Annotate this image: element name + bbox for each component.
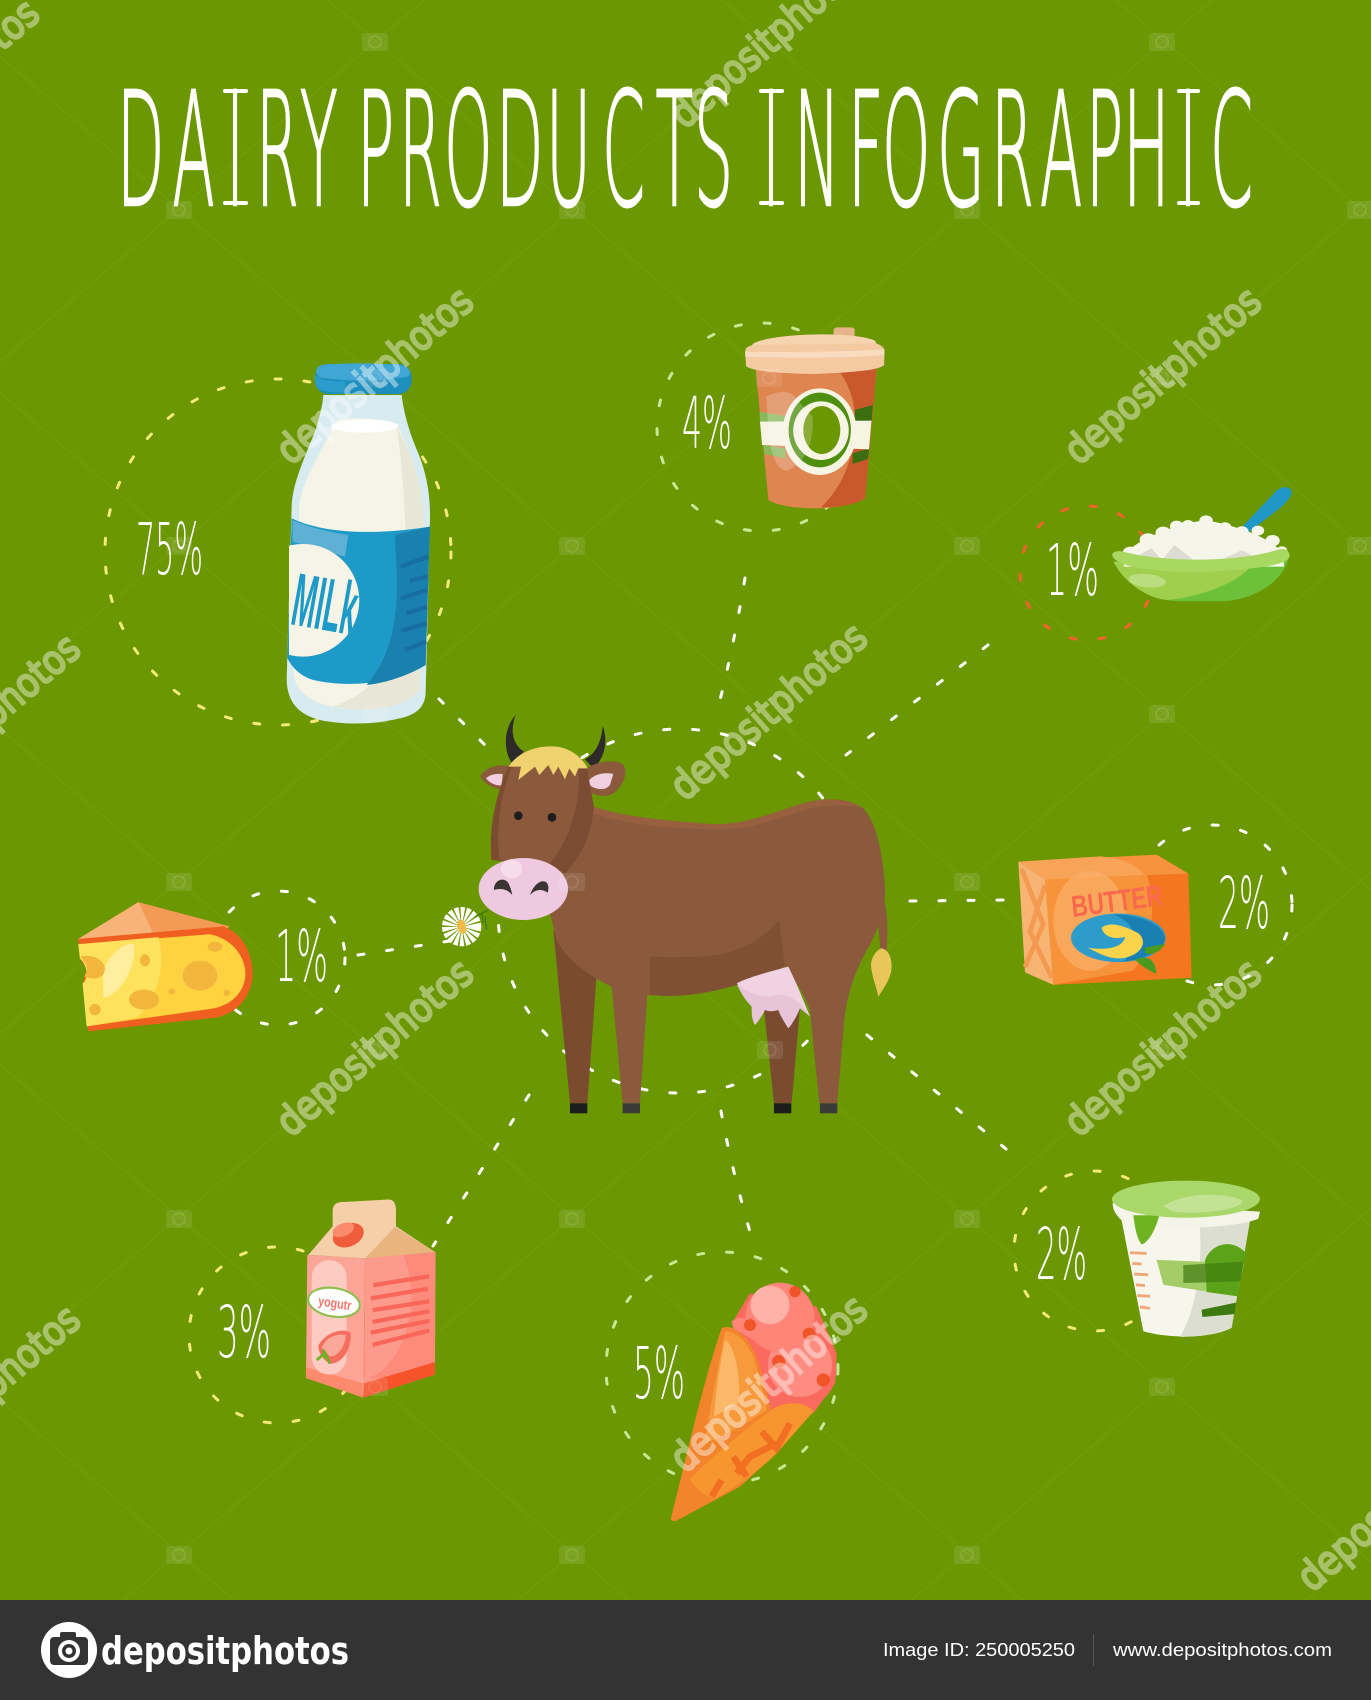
footer image id: Image ID: 250005250 <box>883 1639 1075 1660</box>
cow illustration <box>451 715 892 1113</box>
title: DAIRY PRODUCTS INFOGRAPHIC <box>117 60 1253 243</box>
watermark camera icons <box>166 33 1371 1564</box>
infographic canvas: 1% <box>1046 529 1099 612</box>
infographic canvas: 3% <box>217 1291 271 1374</box>
watermark text: depositphotos <box>267 950 482 1146</box>
watermark text: depositphotos <box>1055 278 1270 474</box>
infographic canvas: 1% <box>275 915 328 998</box>
carton label <box>306 1284 362 1320</box>
cottage cheese bowl <box>1112 487 1292 601</box>
milk bottle: MILk <box>287 557 364 651</box>
yogurt cup <box>1112 1181 1260 1337</box>
infographic canvas: 75% <box>136 508 203 591</box>
watermark text: depositphotos <box>1055 950 1270 1146</box>
milk bottle <box>286 363 430 724</box>
watermark text: depositphotos <box>661 1286 876 1482</box>
infographic canvas: 5% <box>633 1332 685 1415</box>
footer logo icon <box>41 1622 97 1678</box>
butter package: BUTTER <box>1070 879 1164 924</box>
butter package <box>1018 855 1192 985</box>
ice cream cone <box>671 1283 837 1521</box>
dashed ring: ice cream <box>606 1252 838 1484</box>
dashed ring: coffee <box>657 323 865 531</box>
dashed ring: cheese <box>211 891 345 1025</box>
footer url: www.depositphotos.com <box>1112 1639 1332 1660</box>
dashed ring: yogurt carton <box>189 1247 365 1423</box>
watermark text: depositphotos <box>661 614 876 810</box>
dashed ring: butter <box>1132 825 1292 985</box>
infographic canvas: 4% <box>682 382 732 465</box>
dashed ring: cottage cheese <box>1020 506 1154 640</box>
cheese wedge <box>78 902 253 1031</box>
dashed ring: milk <box>105 379 451 725</box>
yogurt carton <box>306 1200 436 1398</box>
coffee cup <box>745 327 885 508</box>
cow connector ring and lines <box>358 578 1008 1246</box>
carton label: yogutr <box>317 1293 352 1313</box>
infographic canvas: 2% <box>1036 1213 1087 1296</box>
footer bar <box>0 1600 1371 1700</box>
infographic canvas: 2% <box>1218 862 1270 945</box>
cottage cheese curds <box>1123 515 1287 567</box>
dashed ring: yogurt cup <box>1014 1171 1174 1331</box>
watermark text: depositphotos <box>267 278 482 474</box>
milk label badge <box>288 544 360 657</box>
footer logo wordmark: depositphotos <box>101 1629 349 1673</box>
